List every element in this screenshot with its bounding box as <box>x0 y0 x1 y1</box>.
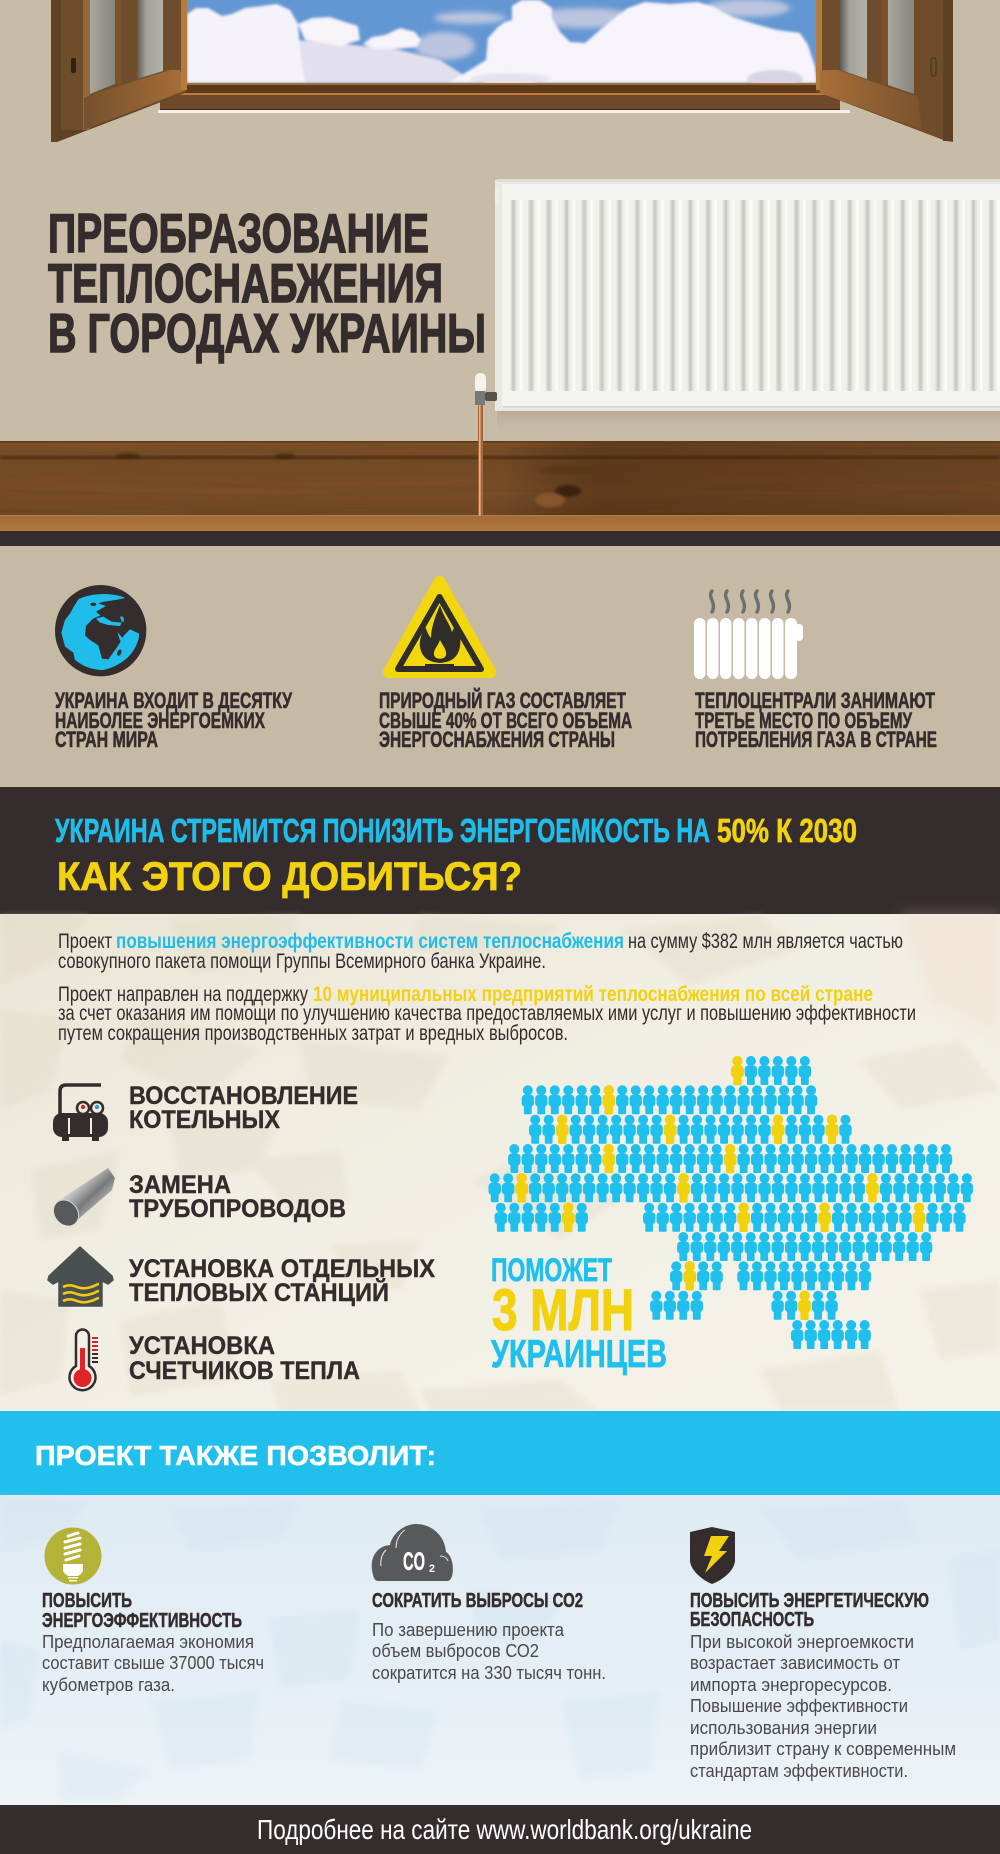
text: reduce CO2 emissions: объем выбросов СО2 <box>372 1641 539 1661</box>
item: pipelines: ТРУБОПРОВОДОВ <box>129 1195 346 1223</box>
text: natural gas fact: ЭНЕРГОСНАБЖЕНИЯ СТРАНЫ <box>379 727 615 752</box>
support paragraph <box>58 983 916 1045</box>
footer: Подробнее на сайте www.worldbank.org/ukraine <box>257 1814 752 1845</box>
text: raise energy efficiency: кубометров газа. <box>42 1675 175 1695</box>
item: boilers <box>129 1082 358 1134</box>
item: boilers: ВОССТАНОВЛЕНИЕ <box>129 1082 358 1110</box>
left window shutter <box>51 0 187 142</box>
text: reduce CO2 emissions: СОКРАТИТЬ ВЫБРОСЫ СО2 <box>372 1590 583 1612</box>
item: heat meters: УСТАНОВКА <box>129 1332 275 1360</box>
panel: project description with textured background <box>0 914 1000 1411</box>
radiator <box>495 179 1000 439</box>
icon: heated house <box>48 1247 113 1306</box>
title: ТЕПЛОСНАБЖЕНИЯ <box>48 252 443 314</box>
intro paragraph: Проект <box>58 930 112 953</box>
text: raise energy efficiency: Предполагаемая экономия <box>42 1632 254 1652</box>
text: raise energy security: ПОВЫСИТЬ ЭНЕРГЕТИЧЕСКУЮ <box>690 1590 929 1612</box>
item: separate heat stations <box>129 1255 435 1307</box>
title <box>48 202 486 364</box>
text: energy intensity fact: СТРАН МИРА <box>55 727 158 752</box>
panel: also allows heading band <box>0 1411 1000 1495</box>
heading: how to achieve: КАК ЭТОГО ДОБИТЬСЯ? <box>57 855 522 899</box>
text: raise energy efficiency: ПОВЫСИТЬ <box>42 1590 132 1612</box>
panel: three key facts <box>54 576 937 748</box>
text: raise energy security: БЕЗОПАСНОСТЬ <box>690 1609 814 1631</box>
item: separate heat stations: ТЕПЛОВЫХ СТАНЦИЙ <box>129 1277 389 1307</box>
icon: flammable warning triangle <box>389 582 490 672</box>
text: energy intensity fact: УКРАИНА ВХОДИТ В ДЕСЯТКУ <box>55 688 292 713</box>
title: В ГОРОДАХ УКРАИНЫ <box>48 302 486 364</box>
callout: will help 3 million Ukrainians: 3 МЛН <box>492 1278 634 1343</box>
text: raise energy security: использования энергии <box>690 1718 877 1738</box>
support paragraph: 10 муниципальных предприятий теплоснабжения по всей стране <box>313 983 873 1006</box>
text: energy intensity fact: НАИБОЛЕЕ ЭНЕРГОЕМКИХ <box>55 708 265 733</box>
thermostat valve and pipe <box>475 373 497 516</box>
text: heating plants fact: ТРЕТЬЕ МЕСТО ПО ОБЪЕМУ <box>695 708 912 733</box>
text: raise energy security: импорта энергоресурсов. <box>690 1675 892 1695</box>
text: raise energy security: приблизит страну к современным <box>690 1739 956 1759</box>
item: pipelines <box>129 1171 346 1223</box>
support paragraph: Проект направлен на поддержку <box>58 983 308 1006</box>
window sill frame <box>158 83 850 113</box>
text: raise energy security: возрастает зависимость от <box>690 1653 900 1673</box>
text: raise energy security <box>690 1590 956 1781</box>
text: heating plants fact <box>695 688 937 752</box>
text: energy intensity fact <box>55 688 292 752</box>
item: heat meters <box>129 1332 360 1385</box>
text: reduce CO2 emissions: По завершению проекта <box>372 1620 565 1640</box>
panel: three benefits <box>0 1495 1000 1805</box>
text: raise energy security: При высокой энергоемкости <box>690 1632 914 1652</box>
window <box>51 0 953 142</box>
icon: radiator with steam <box>694 591 803 679</box>
callout: will help 3 million Ukrainians: УКРАИНЦЕВ <box>491 1333 667 1376</box>
sky with clouds <box>187 0 817 88</box>
item: pipelines: ЗАМЕНА <box>129 1171 231 1199</box>
callout: will help 3 million Ukrainians: ПОМОЖЕТ <box>491 1252 612 1288</box>
item: boilers: КОТЕЛЬНЫХ <box>129 1106 280 1134</box>
right window shutter <box>816 0 953 142</box>
text: raise energy efficiency <box>42 1590 264 1695</box>
intro paragraph: совокупного пакета помощи Группы Всемирного банка Украине. <box>58 950 546 973</box>
support paragraph: путем сокращения производственных затрат и вредных выбросов. <box>58 1022 568 1045</box>
heading: project will also allow: ПРОЕКТ ТАКЖЕ ПОЗВОЛИТ: <box>35 1440 436 1471</box>
intro paragraph <box>58 930 903 973</box>
text: reduce CO2 emissions: сократится на 330 тысяч тонн. <box>372 1663 606 1683</box>
heading: target value: 50% К 2030 <box>717 812 857 849</box>
baseboard and floor <box>0 441 1000 531</box>
icon: CO2 cloud: CO <box>403 1548 425 1576</box>
icon: boiler <box>53 1085 108 1141</box>
intro paragraph: на сумму $382 млн является частью <box>628 930 903 953</box>
callout: will help 3 million Ukrainians <box>491 1252 667 1376</box>
heading: reduce energy intensity: УКРАИНА СТРЕМИТСЯ ПОНИЗИТЬ ЭНЕРГОЕМКОСТЬ НА <box>55 812 710 849</box>
chart: map of Ukraine made of people <box>488 1056 973 1349</box>
item: heat meters: СЧЕТЧИКОВ ТЕПЛА <box>129 1357 360 1385</box>
text: raise energy efficiency: составит свыше 37000 тысяч <box>42 1653 264 1673</box>
text: raise energy security: стандартам эффективности. <box>690 1761 908 1781</box>
footer <box>0 1805 1000 1854</box>
icon: security shield <box>690 1527 735 1584</box>
item: separate heat stations: УСТАНОВКА ОТДЕЛЬНЫХ <box>129 1255 435 1283</box>
icon: pipe <box>48 1168 115 1231</box>
title: ПРЕОБРАЗОВАНИЕ <box>48 202 429 264</box>
text: raise energy security: Повышение эффективности <box>690 1696 908 1716</box>
text: natural gas fact: ПРИРОДНЫЙ ГАЗ СОСТАВЛЯЕТ <box>379 688 626 713</box>
icon: CO2 cloud <box>372 1524 453 1581</box>
text: natural gas fact <box>379 688 632 752</box>
icon: CO2 cloud: 2 <box>429 1563 435 1575</box>
dark divider band <box>0 531 1000 546</box>
text: reduce CO2 emissions <box>372 1590 606 1683</box>
panel: goal heading band <box>0 787 1000 914</box>
text: raise energy efficiency: ЭНЕРГОЭФФЕКТИВНОСТЬ <box>42 1610 242 1632</box>
icon: thermometer <box>70 1330 98 1390</box>
icon: energy-saving bulb <box>44 1528 102 1584</box>
intro paragraph: повышения энергоэффективности систем теплоснабжения <box>116 930 624 953</box>
panel: hero wall with window and radiator <box>0 0 1000 531</box>
text: natural gas fact: СВЫШЕ 40% ОТ ВСЕГО ОБЪЕМА <box>379 708 632 733</box>
icon: globe <box>55 585 150 676</box>
